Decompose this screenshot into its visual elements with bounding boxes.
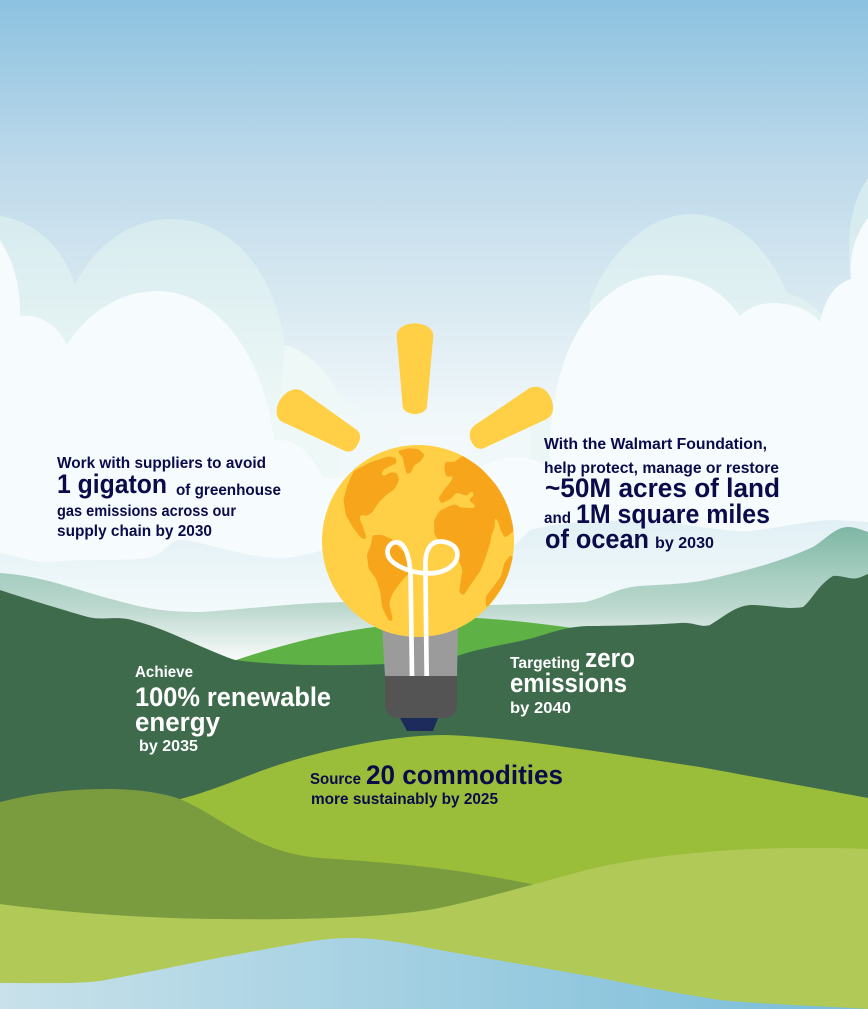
bulb tip <box>400 718 438 731</box>
text: commodities goal: Source <box>310 771 361 788</box>
text: land and ocean goal: ~50M acres of land <box>545 473 780 503</box>
text: zero emissions goal: zero <box>585 643 635 673</box>
light green foreground <box>0 848 868 1009</box>
filament <box>387 541 457 676</box>
pale distant hills <box>0 520 868 640</box>
dark green hills <box>0 574 868 830</box>
olive hill <box>0 789 536 930</box>
text: supplier emissions goal: of greenhouse <box>176 482 281 499</box>
text: renewable energy goal: Achieve <box>135 664 193 681</box>
text: supplier emissions goal: supply chain by 2030 <box>57 523 212 540</box>
text: renewable energy goal: 100% renewable <box>135 682 331 712</box>
text: renewable energy goal: by 2035 <box>139 738 198 755</box>
background clouds <box>0 178 868 600</box>
bulb base <box>385 676 457 718</box>
mid green hill <box>180 735 868 1009</box>
text: zero emissions goal: Targeting <box>510 655 580 672</box>
text: land and ocean goal: With the Walmart Foundation, <box>544 436 767 453</box>
text: land and ocean goal: and <box>544 510 571 527</box>
text: supplier emissions goal: Work with suppliers to avoid <box>57 455 266 472</box>
text: zero emissions goal: by 2040 <box>510 700 571 717</box>
continents <box>344 449 517 620</box>
text: commodities goal <box>310 760 563 808</box>
foreground clouds <box>0 218 868 660</box>
text: land and ocean goal: help protect, manage or restore <box>544 460 779 477</box>
river <box>0 938 868 1009</box>
text: land and ocean goal <box>544 436 780 554</box>
text: renewable energy goal: energy <box>135 707 220 737</box>
teal mountains <box>0 527 868 680</box>
text: supplier emissions goal: gas emissions across our <box>57 503 236 520</box>
text: supplier emissions goal <box>57 455 281 540</box>
text: land and ocean goal: by 2030 <box>655 535 714 552</box>
icon: sun rays <box>277 323 553 452</box>
bright green hill <box>233 618 600 680</box>
text: supplier emissions goal: 1 gigaton <box>57 469 167 499</box>
text: commodities goal: 20 commodities <box>366 760 563 790</box>
icon: light bulb with globe <box>322 445 517 731</box>
sky background <box>0 0 868 660</box>
text: land and ocean goal: 1M square miles <box>576 499 770 529</box>
text: commodities goal: more sustainably by 2025 <box>311 791 498 808</box>
text: renewable energy goal <box>135 664 331 755</box>
text: zero emissions goal: emissions <box>510 668 627 698</box>
bulb neck <box>382 625 458 676</box>
text: zero emissions goal <box>510 643 635 717</box>
globe <box>322 445 514 637</box>
text: land and ocean goal: of ocean <box>545 524 649 554</box>
